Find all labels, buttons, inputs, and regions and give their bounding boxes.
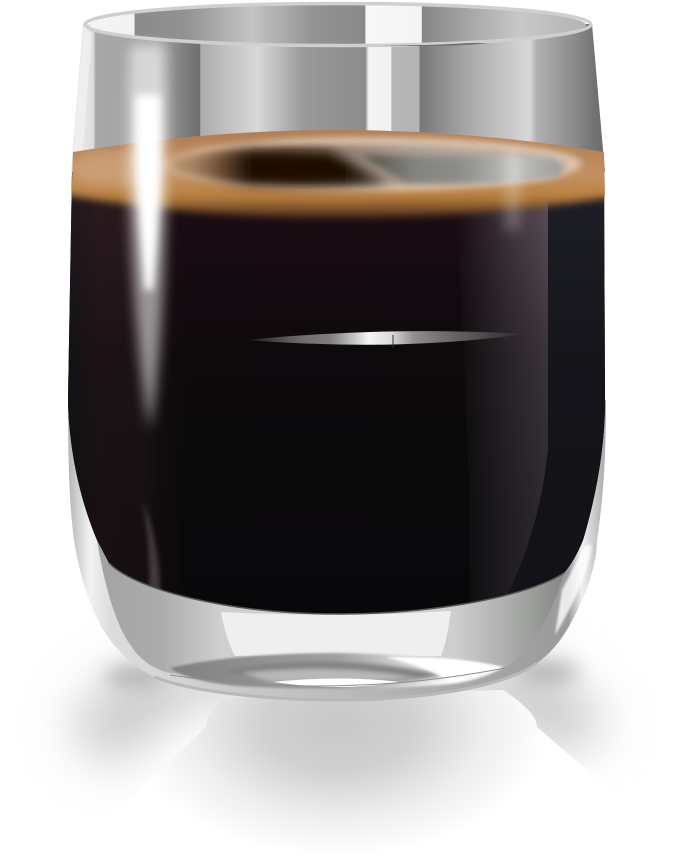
shadow under corners bbox=[105, 665, 165, 687]
surface reflection bbox=[360, 155, 564, 183]
dark surface bbox=[175, 150, 388, 186]
right pale band bbox=[466, 202, 548, 602]
base bright spot bbox=[273, 678, 400, 687]
glass edge left bbox=[73, 26, 92, 160]
left highlight bbox=[128, 45, 167, 430]
crema bbox=[71, 130, 606, 222]
crema left tint bbox=[72, 147, 135, 190]
stripe tick bbox=[392, 335, 394, 348]
base pale ring bbox=[240, 669, 420, 683]
back of glass inside the rim bbox=[90, 5, 586, 45]
glass bottom bbox=[109, 545, 592, 700]
shadow flask bbox=[105, 690, 616, 850]
glass lower wall bbox=[68, 400, 606, 700]
cast shadow bbox=[65, 660, 616, 850]
base edge bbox=[155, 663, 537, 700]
liquid edge line bbox=[109, 563, 564, 614]
side highlight right bbox=[555, 545, 592, 635]
base ellipse bbox=[170, 653, 503, 689]
glass bbox=[68, 4, 606, 700]
coffee surface bbox=[158, 137, 582, 191]
rim bbox=[85, 4, 591, 46]
clear panel bbox=[221, 611, 451, 656]
liquid colour bbox=[60, 170, 615, 620]
mid highlight stripe bbox=[245, 331, 525, 348]
side darkening bbox=[68, 256, 605, 602]
right dark band bbox=[505, 200, 610, 600]
crema body bbox=[71, 130, 606, 222]
coffee liquid bbox=[60, 170, 615, 620]
lower left streak bbox=[143, 506, 162, 589]
rim inner shadow bbox=[380, 43, 490, 46]
shadow wings bbox=[65, 660, 610, 770]
base dark ring bbox=[225, 662, 445, 685]
right translucent highlight bbox=[505, 150, 520, 230]
glass inner body bbox=[97, 500, 583, 685]
base white sweep bbox=[385, 657, 503, 678]
inner tint bbox=[172, 145, 568, 185]
inner contour left bbox=[170, 668, 505, 686]
left reddish band bbox=[68, 173, 158, 585]
glass upper band bbox=[71, 24, 605, 172]
pale ring bbox=[158, 137, 582, 191]
